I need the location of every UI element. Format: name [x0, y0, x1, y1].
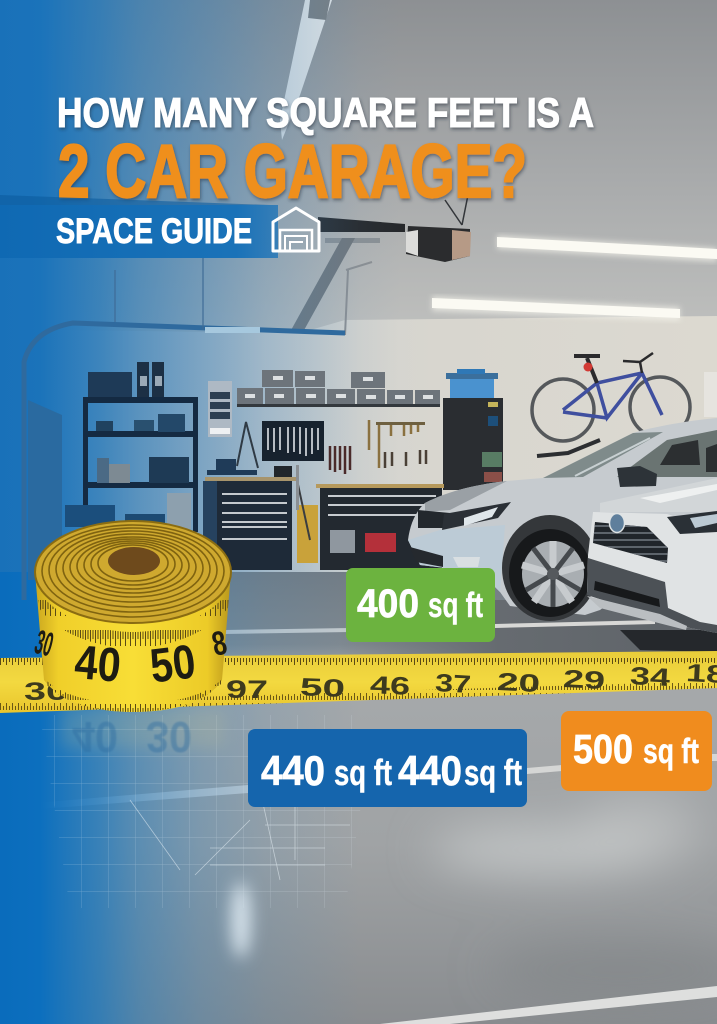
blueprint grid lines [40, 715, 375, 908]
tape numbers: 30 [24, 678, 68, 706]
garage door track [24, 258, 345, 600]
floor light glint [231, 882, 251, 958]
tape reflection on floor: 40 [72, 712, 118, 761]
roll numbers: 50 [147, 635, 198, 694]
roll numbers: 40 [73, 636, 123, 693]
blue gradient overlay [0, 0, 500, 1024]
tape reflection on floor: 30 [146, 712, 192, 761]
left metal shelf [65, 362, 198, 532]
tape numbers: 37 [434, 669, 472, 699]
back wall [22, 316, 717, 600]
floor [0, 572, 717, 1024]
hanging cloth on left wall [28, 400, 62, 580]
door opener rail and arms [290, 195, 468, 335]
floor dark near cars [340, 600, 717, 654]
callout: 500 sq ft: sq ft [643, 732, 699, 771]
roll body [35, 572, 231, 712]
tape numbers: 18 [685, 659, 717, 689]
right tool chest [316, 484, 444, 570]
storage shelf with boxes [237, 370, 440, 407]
tape bottom ticks [0, 681, 717, 713]
tall dark cabinet [443, 398, 503, 490]
left tool chest [203, 477, 297, 570]
tape top ticks [0, 651, 717, 670]
floor painted lines [0, 628, 717, 1024]
roll bottom ticks [46, 680, 221, 712]
blue storage bin [446, 369, 498, 398]
tape reflection on floor [60, 708, 225, 761]
ceiling light tube lower [432, 296, 680, 321]
callout: 400 sq ft: sq ft [428, 586, 483, 625]
title line two: 2 CAR GARAGE? [58, 129, 527, 213]
ceiling light tube upper [497, 235, 717, 262]
callout: 400 sq ft [346, 568, 495, 642]
roll numbers: 30 [31, 623, 57, 664]
tape numbers: 97 [226, 676, 268, 704]
garage door opener [406, 226, 471, 262]
callout: 440 sq ft: sq ft [464, 752, 522, 793]
tape numbers [24, 659, 717, 706]
roll numbers [31, 623, 230, 694]
floor shadow under SUV [620, 630, 717, 652]
roll numbers: 8 [209, 624, 230, 664]
tape body [0, 651, 717, 713]
roll top spiral rings [35, 521, 231, 623]
measuring tape strip [0, 651, 717, 713]
vise [207, 459, 292, 478]
tape numbers: 50 [300, 673, 346, 703]
callout: 500 sq ft [561, 711, 712, 791]
white SUV [587, 478, 717, 633]
callout: 440 sq ft [248, 729, 527, 807]
tape numbers: 20 [496, 668, 541, 698]
subtitle banner [0, 195, 278, 258]
tape numbers: 46 [370, 671, 411, 701]
hanging hand tools [237, 420, 426, 474]
roll center hole [108, 547, 160, 575]
wall outlet panel [704, 372, 717, 417]
callout: 500 sq ft: 500 [573, 726, 633, 772]
ceiling fixture [308, 0, 330, 20]
subtitle text: SPACE GUIDE [56, 212, 252, 251]
callout: 440 sq ft: sq ft [334, 752, 392, 793]
yellow bucket with tools [296, 465, 318, 563]
wrench board [262, 421, 324, 461]
hanging tool rack [208, 381, 232, 437]
wall-mounted bicycle [532, 353, 690, 456]
floor reflections [430, 795, 717, 1000]
blue tint over upper room [0, 0, 400, 572]
tape numbers: 29 [562, 665, 606, 695]
silver car [408, 418, 717, 621]
ceiling light strip [280, 0, 332, 140]
title line one: HOW MANY SQUARE FEET IS A [57, 89, 594, 136]
icon: garage [273, 208, 319, 251]
callout: 400 sq ft: 400 [357, 582, 419, 626]
callout: 440 sq ft: 440 [261, 747, 325, 794]
callout: 440 sq ft: 440 [398, 747, 462, 794]
roll top ticks [37, 590, 229, 648]
ceiling [0, 0, 717, 335]
tape numbers: 34 [629, 662, 671, 692]
measuring tape roll [31, 521, 231, 712]
floor line near cars [495, 620, 655, 628]
